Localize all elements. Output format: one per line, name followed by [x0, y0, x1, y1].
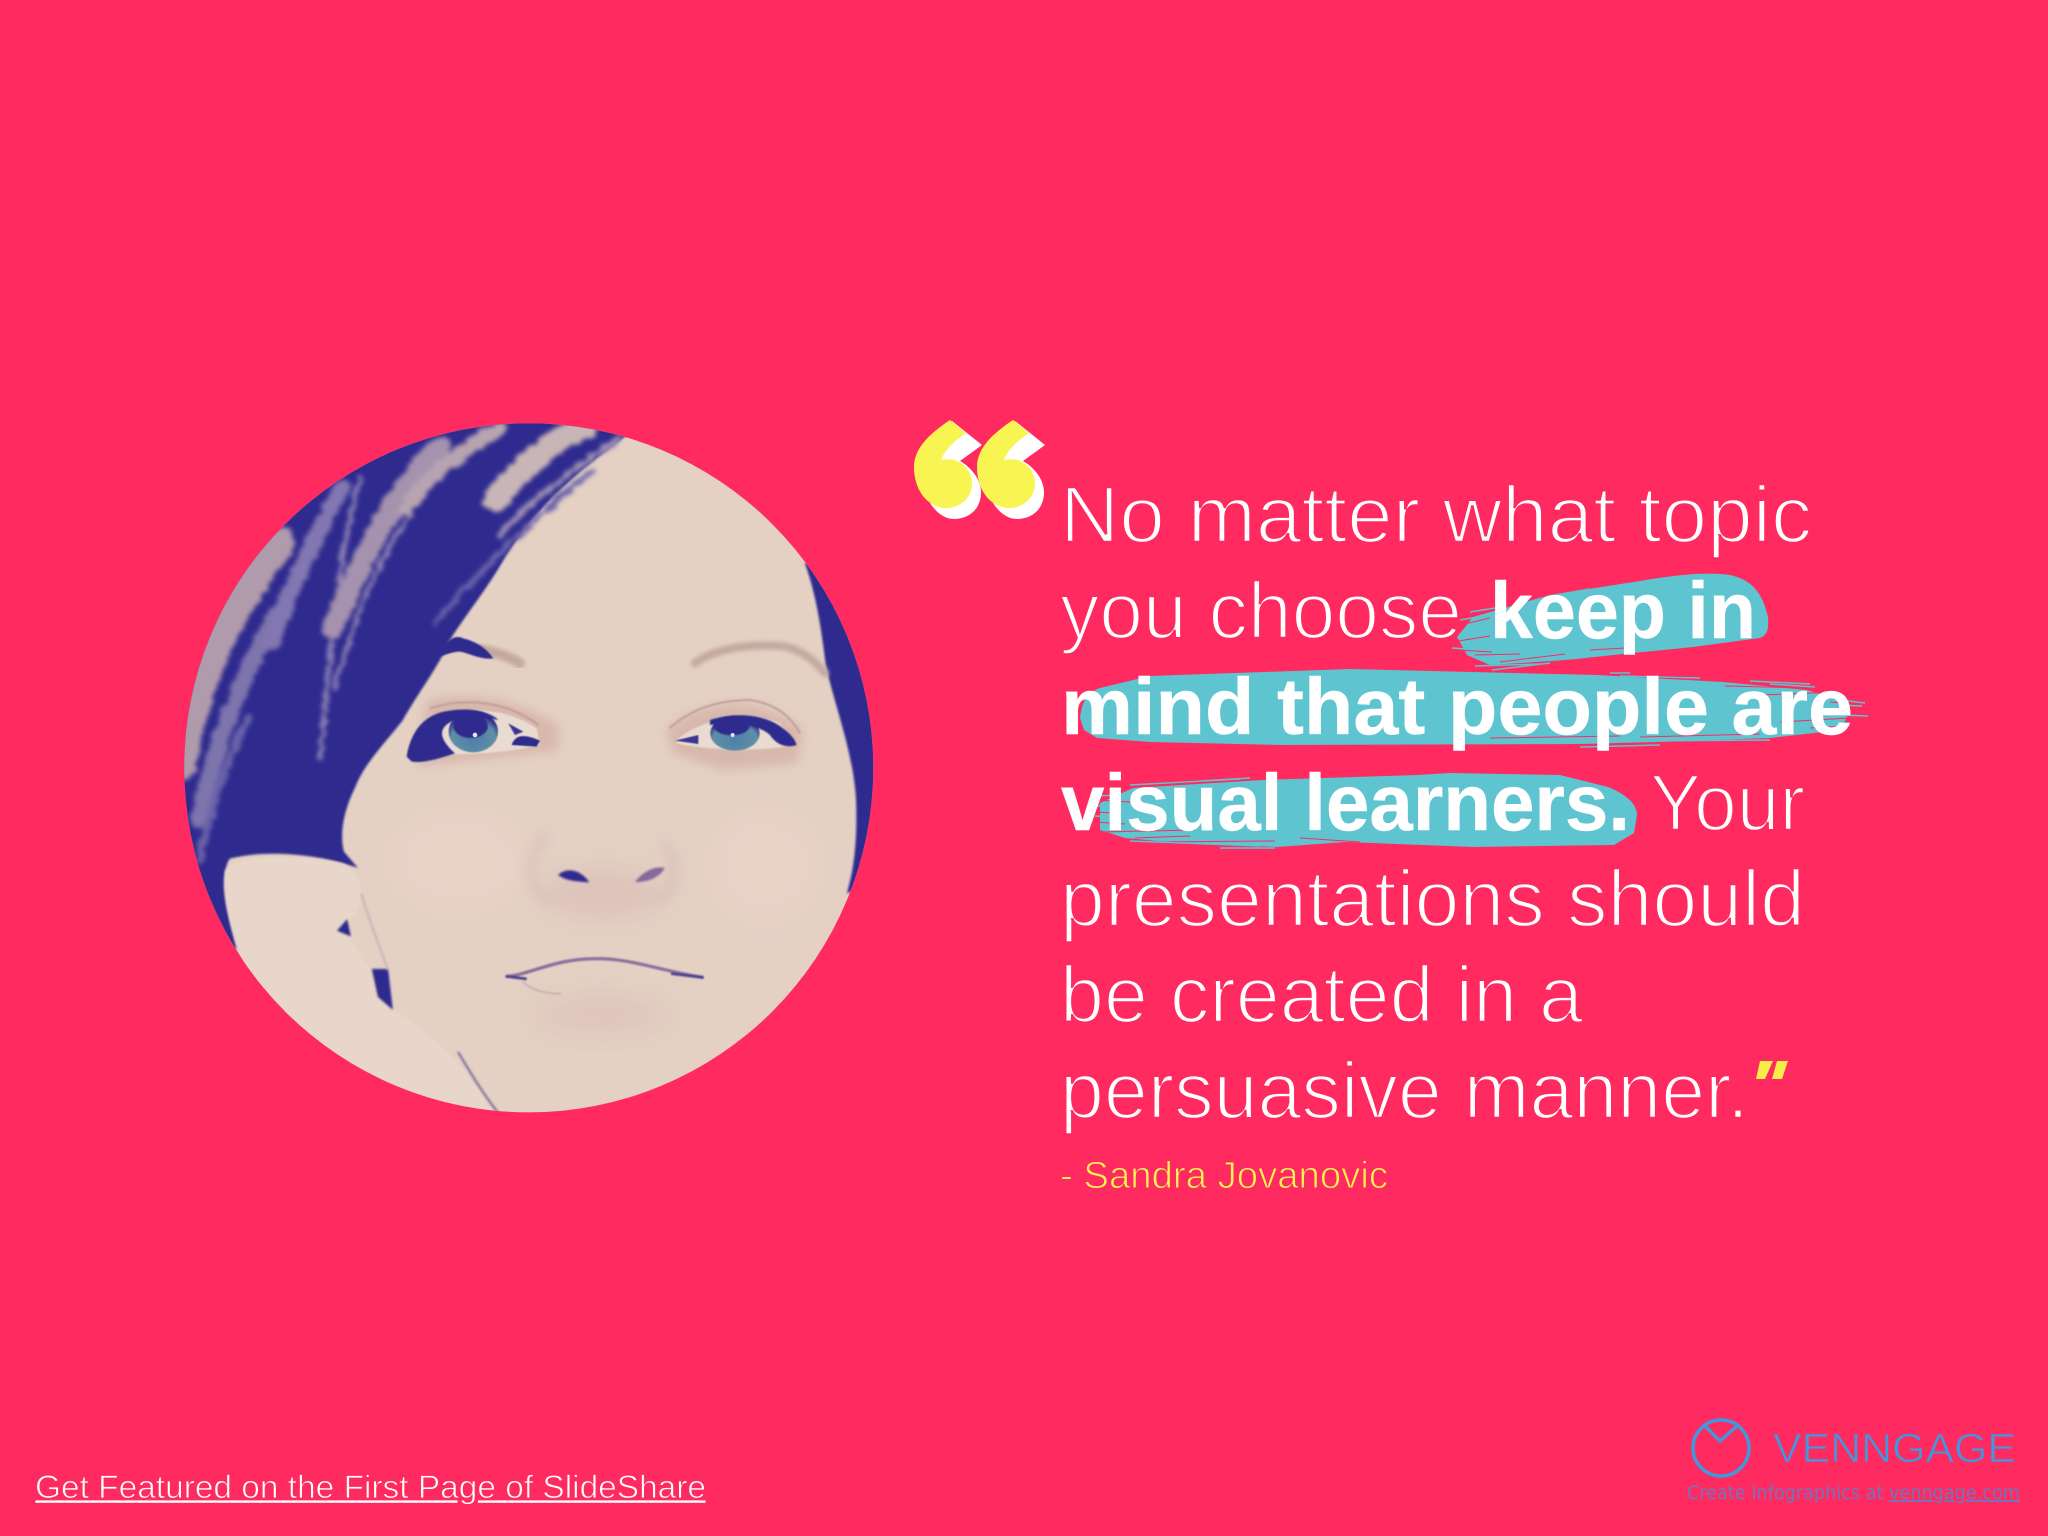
right eye [667, 700, 803, 770]
brush: visual learners [1080, 773, 1637, 848]
nose [558, 867, 665, 882]
quote text: light lines: you choose [1060, 566, 1462, 655]
highlight brush strokes [1080, 574, 1868, 848]
eyes and eyebrows [407, 637, 825, 770]
portrait photo [184, 423, 874, 1112]
quote text: light lines: No matter what topic [1060, 470, 1812, 559]
hair highlights [179, 423, 619, 861]
left eyebrow [477, 648, 520, 663]
quote text: light lines [1060, 470, 1812, 1135]
skin shading [528, 838, 678, 1030]
venngage wordmark: VENNGAGE [1773, 1425, 2016, 1471]
hand [224, 857, 500, 1117]
quote text: light lines: presentations should [1060, 854, 1805, 943]
opening quotation mark icon [914, 420, 1045, 519]
left eyebrow dark part [440, 637, 493, 659]
quote text: light lines: Your [1650, 758, 1805, 847]
highlighted bold text: mind that people are [1061, 662, 1853, 751]
infographic slide [35, 420, 2020, 1504]
highlighted bold text [1061, 566, 1853, 847]
footer link: Get Featured on the First Page of SlideShare [35, 1469, 706, 1505]
highlighted bold text: visual learners. [1061, 758, 1630, 847]
right eyebrow [695, 646, 825, 673]
venngage logo [1687, 1420, 2020, 1504]
closing quotation mark [1756, 1061, 1788, 1079]
quote text: light lines: persuasive manner. [1060, 1046, 1749, 1135]
icon: venngage circle [1693, 1420, 1749, 1476]
hair [160, 409, 905, 949]
highlighted bold text: keep in [1490, 566, 1756, 655]
brush: mind that people are [1080, 669, 1868, 747]
quote text: light lines: be created in a [1060, 950, 1583, 1039]
brush: keep in [1452, 574, 1768, 670]
left eye [407, 697, 560, 767]
mouth [507, 959, 702, 994]
create infographics tagline: Create Infographics at venngage.com [1687, 1482, 2020, 1504]
quote attribution: - Sandra Jovanovic [1060, 1155, 1388, 1197]
